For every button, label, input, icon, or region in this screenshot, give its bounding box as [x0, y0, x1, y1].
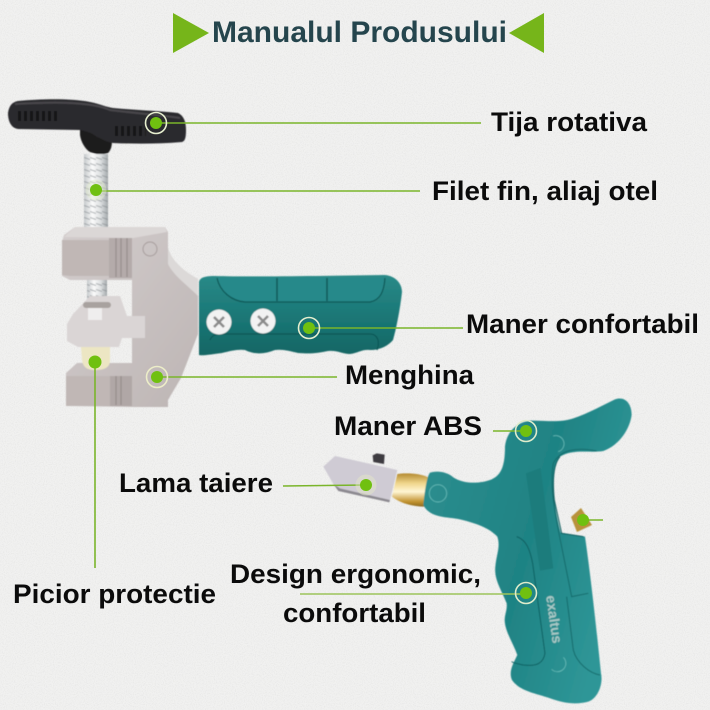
green ergonomic grip: [199, 275, 402, 355]
T handle: [8, 99, 186, 155]
callout: Picior protectie: [13, 356, 216, 609]
screw heads: [206, 310, 232, 334]
callout: Design ergonomic, confortabil: confortabil: [283, 598, 426, 628]
callout: Filet fin, aliaj otel: [86, 176, 658, 206]
callout: Maner ABS: [334, 411, 536, 442]
brass collar: [392, 473, 428, 507]
threaded screw: [84, 154, 108, 302]
teal cutter body: [423, 399, 632, 703]
callout: Maner confortabil: Maner confortabil: [466, 309, 699, 339]
side screw: [571, 508, 592, 532]
callout: Maner ABS: Maner ABS: [334, 411, 482, 441]
cutter blade: [323, 453, 397, 502]
callout: Tija rotativa: [146, 107, 648, 137]
callout: side screw marker: [577, 514, 603, 526]
callout: Lama taiere: [119, 468, 376, 498]
callout: Picior protectie: Picior protectie: [13, 579, 216, 609]
moving jaw and protective foot: [67, 296, 145, 370]
title text: Manualul Produsului: [212, 16, 507, 49]
callout: Menghina: [146, 360, 475, 390]
brand text: exaltus: [543, 594, 566, 644]
icon: right green triangle: [509, 13, 544, 53]
callout: Design ergonomic, confortabil: Design ergonomic,: [230, 559, 481, 589]
silver clamp body: [62, 227, 198, 407]
illustration: glass breaker plier: [8, 99, 402, 407]
callout: Design ergonomic, confortabil: [230, 559, 536, 628]
icon: left green triangle: [173, 13, 209, 53]
callout: Tija rotativa: Tija rotativa: [491, 107, 648, 137]
callout: Lama taiere: Lama taiere: [119, 468, 273, 498]
title banner: [173, 13, 544, 53]
callout: Menghina: Menghina: [345, 360, 475, 390]
illustration: glass cutter: [323, 399, 632, 703]
callout: Maner confortabil: [298, 309, 699, 339]
callout: Filet fin, aliaj otel: Filet fin, aliaj otel: [432, 176, 658, 206]
